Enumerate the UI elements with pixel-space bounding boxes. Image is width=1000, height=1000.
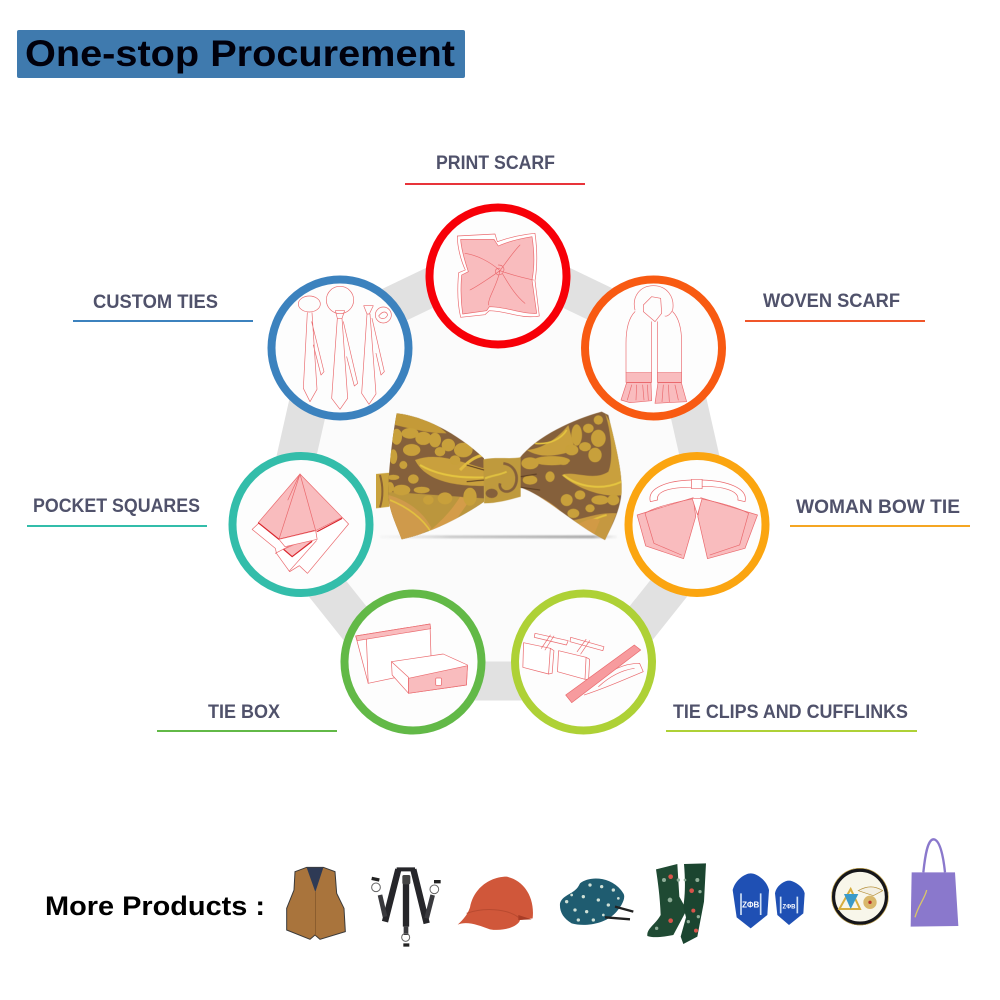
heptagon ring behind the product circles <box>280 255 716 681</box>
icon: woman bow tie <box>637 479 757 559</box>
circle: tie box <box>344 594 482 730</box>
label: woven scarf: WOVEN SCARF <box>763 290 900 312</box>
icon: folded square scarf <box>457 233 539 317</box>
product: round masonic pin <box>832 868 888 925</box>
circle: pocket squares <box>232 456 370 593</box>
label: print scarf: PRINT SCARF <box>436 152 555 174</box>
product: purple tote bag <box>911 839 958 927</box>
more products heading: More Products : <box>45 891 265 921</box>
product: patterned headband scarf <box>560 878 633 925</box>
product: suspenders <box>372 869 441 945</box>
product: green rose socks <box>647 863 706 944</box>
central photo: gold paisley bow tie <box>376 412 626 543</box>
title banner: One-stop Procurement <box>25 33 455 74</box>
circle: woman bow tie <box>628 456 766 593</box>
product: fraternity shield pins <box>733 873 805 928</box>
circle: tie clips and cufflinks <box>515 594 652 730</box>
label: tie box: TIE BOX <box>208 701 280 723</box>
label: custom ties: CUSTOM TIES <box>93 291 218 313</box>
circle: print scarf <box>430 208 566 344</box>
icon: folded pocket squares <box>252 474 349 573</box>
product: fraternity shield pins: ΖΦΒ <box>742 900 759 909</box>
product: waistcoat <box>287 867 345 939</box>
icon: fringed scarf <box>621 286 687 403</box>
circle: custom ties <box>272 280 408 416</box>
icon: gift boxes <box>356 624 467 693</box>
label: pocket squares: POCKET SQUARES <box>33 495 200 517</box>
circle: woven scarf <box>585 280 722 416</box>
label: tie clips and cufflinks: TIE CLIPS AND CUFFLINKS <box>673 701 908 723</box>
product: fraternity shield pins: ΖΦΒ <box>783 904 796 910</box>
product: baseball cap <box>458 877 533 930</box>
label: woman bow tie: WOMAN BOW TIE <box>796 496 960 518</box>
icon: three neckties <box>298 286 391 409</box>
icon: cufflinks and tie clip <box>523 633 643 703</box>
